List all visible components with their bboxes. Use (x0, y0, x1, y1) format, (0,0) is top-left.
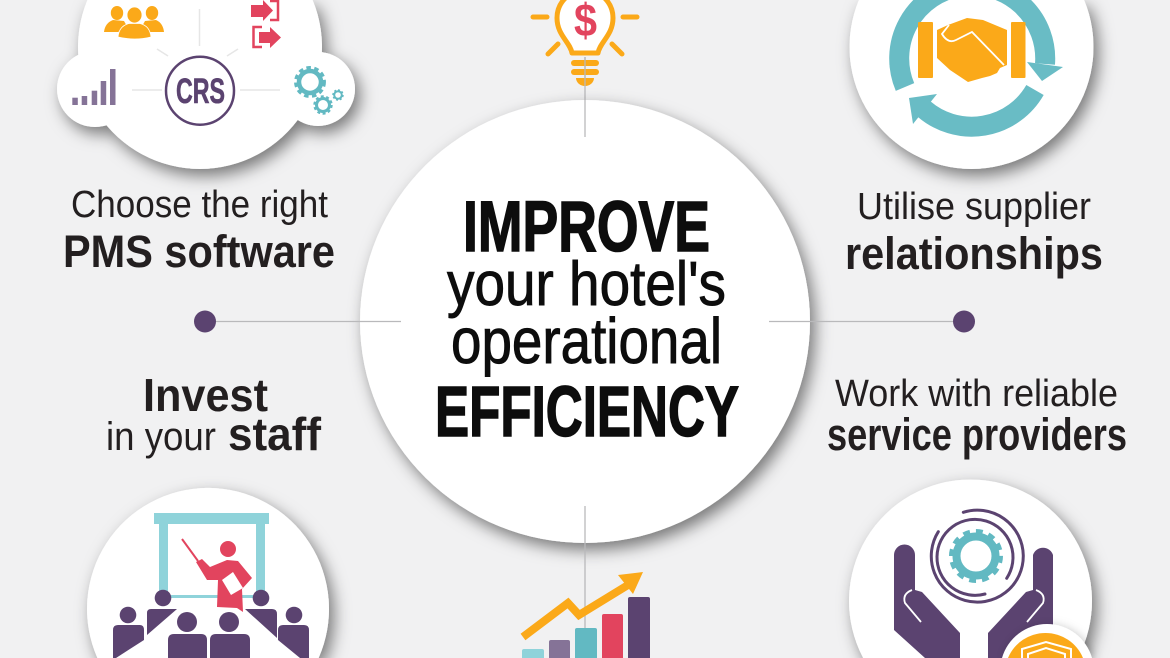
text: Work with reliable service providers (827, 373, 1127, 460)
panel background (849, 480, 1092, 658)
panel background: cloud of circles (57, 0, 355, 169)
central heading: operational (451, 305, 722, 377)
central circle (360, 100, 810, 543)
panel: rising chart icon (522, 572, 650, 658)
connector: top vertical line (584, 57, 586, 137)
text: Invest in your staff (106, 369, 322, 460)
panel: staff training icon (87, 488, 329, 658)
panel: supplier relationships icon (849, 0, 1094, 169)
icon: rings (931, 510, 1023, 602)
connector: right line with dot (769, 310, 975, 332)
text: Invest in your staff: staff (228, 408, 322, 460)
panel: PMS software icon (57, 0, 355, 169)
central heading (435, 188, 739, 452)
text: Choose the right PMS software: PMS software (63, 226, 335, 277)
bar chart (522, 597, 650, 658)
connector: top line over circle (584, 98, 586, 137)
panel: reliable service providers icon (849, 480, 1092, 658)
text: Invest in your staff: Invest (143, 369, 268, 421)
text: Utilise supplier relationships: relationships (845, 228, 1103, 279)
arrow: upward trend (523, 572, 643, 637)
central heading: IMPROVE (463, 188, 710, 267)
icon: presenter (182, 539, 252, 612)
icon: gear (952, 532, 1000, 580)
connector: left line with dot (194, 310, 401, 332)
panel background (849, 0, 1094, 169)
text: Work with reliable service providers: Work with reliable (835, 373, 1118, 415)
icon: people (104, 6, 164, 39)
text: Utilise supplier relationships (845, 186, 1103, 279)
icon: left hand (894, 544, 960, 658)
connector: bottom vertical line (584, 506, 586, 628)
icon: audience (113, 590, 309, 658)
central heading: EFFICIENCY (435, 373, 739, 452)
icon: handshake (918, 18, 1026, 82)
icon: CRS badge: CRS (176, 72, 225, 111)
icon: gears (296, 68, 343, 114)
text: Choose the right PMS software (63, 184, 335, 277)
panel background (87, 488, 329, 658)
icon: CRS badge (166, 57, 234, 125)
text: Choose the right PMS software: Choose the right (71, 184, 328, 226)
badge: shield (1002, 624, 1092, 658)
icon: presentation screen (154, 513, 269, 598)
central heading: your hotel's (447, 250, 726, 319)
text: Invest in your staff: in your (106, 415, 216, 459)
text: Utilise supplier relationships: Utilise supplier (857, 186, 1091, 228)
spoke lines (132, 9, 280, 90)
icon: signal bars (72, 69, 116, 105)
icon: circular arrows (899, 0, 1063, 127)
icon: light bulb with dollar (533, 0, 637, 86)
icon: right hand (988, 548, 1053, 658)
icon: check-in and check-out arrows (251, 0, 281, 48)
